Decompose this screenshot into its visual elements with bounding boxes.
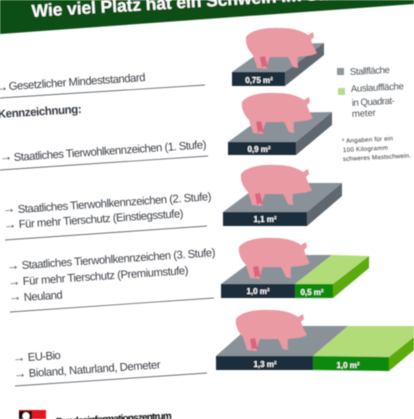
platform and pig: 0,75 m²	[232, 28, 324, 86]
row: Gesetzlicher Mindeststandard	[0, 72, 205, 98]
platform and pig: 1,3 m² + 1,0 m²: 1,0 m²	[336, 361, 360, 370]
platform and pig: 0,9 m²: 0,9 m²	[247, 145, 271, 154]
row: Stufe 2: Staatliches Tierwohlkennzeichen (2. Stufe)	[17, 191, 212, 216]
row: Bio: →	[12, 350, 26, 365]
legend	[337, 65, 411, 163]
platform and pig: 1,3 m² + 1,0 m²: 1,3 m²	[253, 360, 277, 369]
legend item: Auslauffläche: meter	[352, 108, 377, 120]
platform and pig: 1,3 m² + 1,0 m²	[216, 310, 414, 371]
footnote: 100 Kilogramm	[343, 145, 388, 154]
platform and pig: 1,1 m²: 1,1 m²	[253, 215, 277, 224]
row: Stufe 2: Für mehr Tierschutz (Einstiegsstufe)	[18, 208, 184, 231]
row: Stufe 3: Staatliches Tierwohlkennzeichen (3. Stufe)	[21, 247, 216, 272]
legend item: Auslauffläche: in Quadrat-	[352, 96, 395, 109]
platform and pig: 1,1 m²	[223, 165, 342, 226]
footnote: * Angaben für ein	[342, 135, 394, 145]
legend item: Stallfläche: Stallfläche	[350, 65, 390, 78]
row: Stufe 2: →	[3, 217, 17, 232]
platform and pig: 1,0 m² + 0,5 m²: 1,0 m²	[246, 287, 270, 296]
row: Stufe 2	[2, 191, 212, 240]
platform and pig: 0,75 m²: 0,75 m²	[245, 76, 273, 85]
row: Stufe 3: →	[7, 274, 21, 289]
row: Stufe 3: Für mehr Tierschutz (Premiumstufe)	[22, 265, 189, 288]
row: Bio	[12, 350, 207, 386]
platform and pig: 1,0 m² + 0,5 m²: 0,5 m²	[300, 288, 324, 297]
footer logo	[19, 410, 46, 419]
row: Stufe 1: Staatliches Tierwohlkennzeichen (1. Stufe)	[13, 139, 207, 164]
row: Bio: EU-Bio	[27, 350, 61, 364]
platform and pig: 0,9 m²	[228, 93, 332, 155]
legend item: Auslauffläche: Auslauffläche	[351, 81, 404, 95]
row: Gesetzlicher Mindeststandard: Gesetzlicher Mindeststandard	[8, 72, 146, 93]
legend item: Auslauffläche	[338, 81, 404, 120]
row: Stufe 3: Neuland	[23, 289, 63, 304]
row: Stufe 3: →	[6, 258, 20, 273]
row: Bio: →	[13, 366, 27, 381]
platform and pig: 1,0 m² + 0,5 m²	[221, 238, 369, 298]
row: Stufe 2: →	[2, 201, 16, 216]
row: Stufe 3	[6, 247, 216, 312]
footnote: schweres Mastschwein.	[343, 152, 411, 163]
row: Bio: Bioland, Naturland, Demeter	[28, 359, 161, 380]
footnote	[342, 135, 411, 163]
row: Stufe 3: →	[8, 289, 22, 304]
header banner	[0, 0, 414, 34]
